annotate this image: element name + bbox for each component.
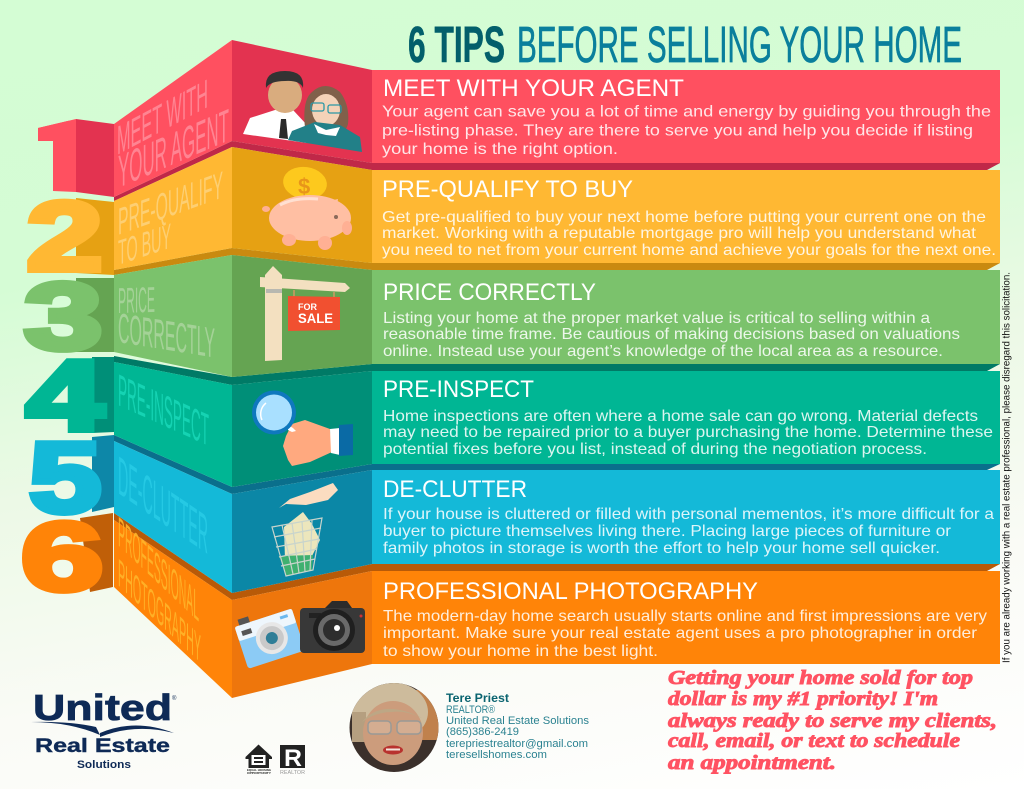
logo: United Real Estate Solutions: Real Estate — [35, 736, 170, 757]
icon: realtor mark: R — [284, 745, 302, 772]
step 4: pre-inspect: PRE-INSPECT — [118, 365, 209, 456]
panel text: pre-inspect — [383, 377, 993, 458]
panel text: pre-inspect: potential fixes before you list, instead of during the negotiation process. — [383, 441, 927, 458]
icon: piggy bank with coin — [262, 164, 352, 250]
panel text: pre-qualify to buy: market. Working with a reputable mortgage pro will help you understand what — [382, 225, 977, 242]
icon: for sale sign: FOR — [298, 302, 317, 312]
icon: realtor mark: REALTOR — [280, 770, 305, 776]
agent contact details — [446, 691, 589, 761]
number 6: 6 — [21, 502, 103, 611]
side label: price correctly: CORRECTLY — [118, 304, 215, 367]
closing message: always ready to serve my clients, — [668, 710, 997, 732]
number 2: 2 — [26, 182, 103, 291]
step 5: de-clutter: DE-CLUTTER — [118, 444, 208, 566]
side label: meet with your agent: YOUR AGENT — [118, 100, 229, 198]
panel text: meet with your agent: Your agent can save you a lot of time and energy by guiding you through the — [382, 104, 991, 120]
panel text: pre-qualify to buy: you need to net from your current home and achieve your goals for the next one. — [382, 242, 996, 259]
step 2: pre-qualify to buy — [26, 141, 1000, 291]
panel text: price correctly — [383, 280, 960, 360]
agent contact details: (865)386-2419 — [446, 726, 519, 738]
panel text: price correctly: online. Instead use your agent’s knowledge of the local area as a resource. — [383, 343, 943, 360]
agent contact details: REALTOR® — [446, 704, 495, 716]
panel text: de-clutter: If your house is cluttered or filled with personal mementos, it’s more difficult for a — [383, 506, 994, 523]
panel text: pre-qualify to buy: Get pre-qualified to buy your next home before putting your current one on the — [382, 209, 986, 226]
panel text: professional photography: The modern-day home search usually starts online and first impressions are very — [383, 608, 987, 625]
disclaimer: If you are already working with a real estate professional, please disregard this solicitation. — [1000, 272, 1012, 663]
closing message: an appointment. — [668, 752, 836, 774]
panel text: professional photography: important. Make sure your real estate agent uses a pro photographer in order — [383, 625, 978, 642]
icon: realtor mark — [280, 745, 305, 776]
closing message — [668, 667, 997, 774]
step 1: meet with your agent — [38, 40, 1000, 197]
agent contact details: United Real Estate Solutions — [446, 715, 589, 727]
panel text: de-clutter: buyer to picture themselves living there. Placing large pieces of furniture or — [383, 523, 952, 540]
side label: meet with your agent: MEET WITH — [117, 70, 208, 164]
number 1: 1 — [28, 91, 89, 214]
icon: magnifying glass in hand — [252, 390, 353, 466]
closing message: call, email, or text to schedule — [668, 730, 960, 752]
closing message: dollar is my #1 priority! I'm — [668, 688, 938, 710]
panel text: meet with your agent — [382, 76, 991, 158]
title: 6 TIPS — [408, 16, 505, 73]
agent contact details: Tere Priest — [446, 691, 509, 705]
side label: pre-qualify to buy: TO BUY — [118, 217, 171, 273]
panel text: professional photography — [383, 579, 987, 660]
side label: price correctly — [118, 280, 215, 367]
icon: agent couple — [243, 71, 362, 152]
panel text: de-clutter — [383, 477, 994, 557]
step 6: professional photography — [21, 502, 1000, 698]
agent contact details: terepriestrealtor@gmail.com — [446, 738, 588, 750]
icon: equal housing opportunity — [246, 744, 272, 775]
side label: professional photography — [118, 507, 201, 672]
step 4: pre-inspect — [26, 340, 1000, 487]
step 6: professional photography: PROFESSIONAL — [118, 507, 199, 631]
panel text: de-clutter: family photos in storage is worth the effort to help your home sell quicker. — [383, 540, 940, 557]
number 5: 5 — [29, 421, 101, 534]
logo: United Real Estate Solutions: United — [33, 687, 172, 728]
panel text: pre-qualify to buy: PRE-QUALIFY TO BUY — [382, 177, 633, 203]
step 3: price correctly — [24, 248, 1000, 377]
icon: for sale sign — [260, 266, 350, 361]
icon: equal housing opportunity: OPPORTUNITY — [247, 771, 271, 775]
logo: United Real Estate Solutions: ® — [172, 695, 177, 702]
panel text: de-clutter: DE-CLUTTER — [383, 477, 527, 503]
panel text: price correctly: reasonable time frame. Be cautious of making decisions based on valuations — [383, 326, 960, 343]
panel text: pre-inspect: may need to be repaired prior to a buyer purchasing the home. Determine these — [383, 424, 993, 441]
side label: pre-qualify to buy: PRE-QUALIFY — [118, 164, 223, 244]
panel text: pre-qualify to buy — [382, 177, 996, 259]
panel text: price correctly: Listing your home at the proper market value is critical to selling within a — [383, 310, 930, 327]
closing message: Getting your home sold for top — [668, 667, 973, 689]
number 4: 4 — [26, 340, 104, 451]
panel text: pre-inspect: PRE-INSPECT — [383, 377, 534, 403]
icon: cameras — [233, 601, 365, 669]
logo: United Real Estate Solutions — [31, 687, 177, 771]
number 1 — [38, 119, 114, 197]
panel text: meet with your agent: MEET WITH YOUR AGENT — [383, 76, 684, 102]
panel text: professional photography: PROFESSIONAL PHOTOGRAPHY — [383, 579, 758, 605]
number 3: 3 — [24, 264, 102, 370]
panel text: pre-inspect: Home inspections are often where a home sale can go wrong. Material defects — [383, 408, 978, 425]
step 5: de-clutter — [29, 421, 1000, 593]
panel text: meet with your agent: your home is the right option. — [382, 141, 618, 158]
agent contact details: teresellshomes.com — [446, 749, 547, 761]
icon: hand dropping paper into basket — [272, 483, 338, 576]
agent photo — [349, 682, 439, 773]
icon: piggy bank with coin: $ — [298, 174, 310, 199]
panel text: meet with your agent: pre-listing phase. They are there to serve you and help you decide if listing — [382, 122, 973, 140]
logo: United Real Estate Solutions: Solutions — [77, 759, 131, 771]
side label: meet with your agent — [117, 70, 229, 198]
icon: equal housing opportunity: EQUAL HOUSING — [247, 768, 272, 772]
side label: price correctly: PRICE — [118, 280, 155, 322]
side label: pre-qualify to buy — [118, 164, 223, 273]
panel text: price correctly: PRICE CORRECTLY — [383, 280, 596, 306]
icon: for sale sign: SALE — [298, 310, 333, 326]
panel text: professional photography: to show your home in the best light. — [383, 643, 658, 660]
